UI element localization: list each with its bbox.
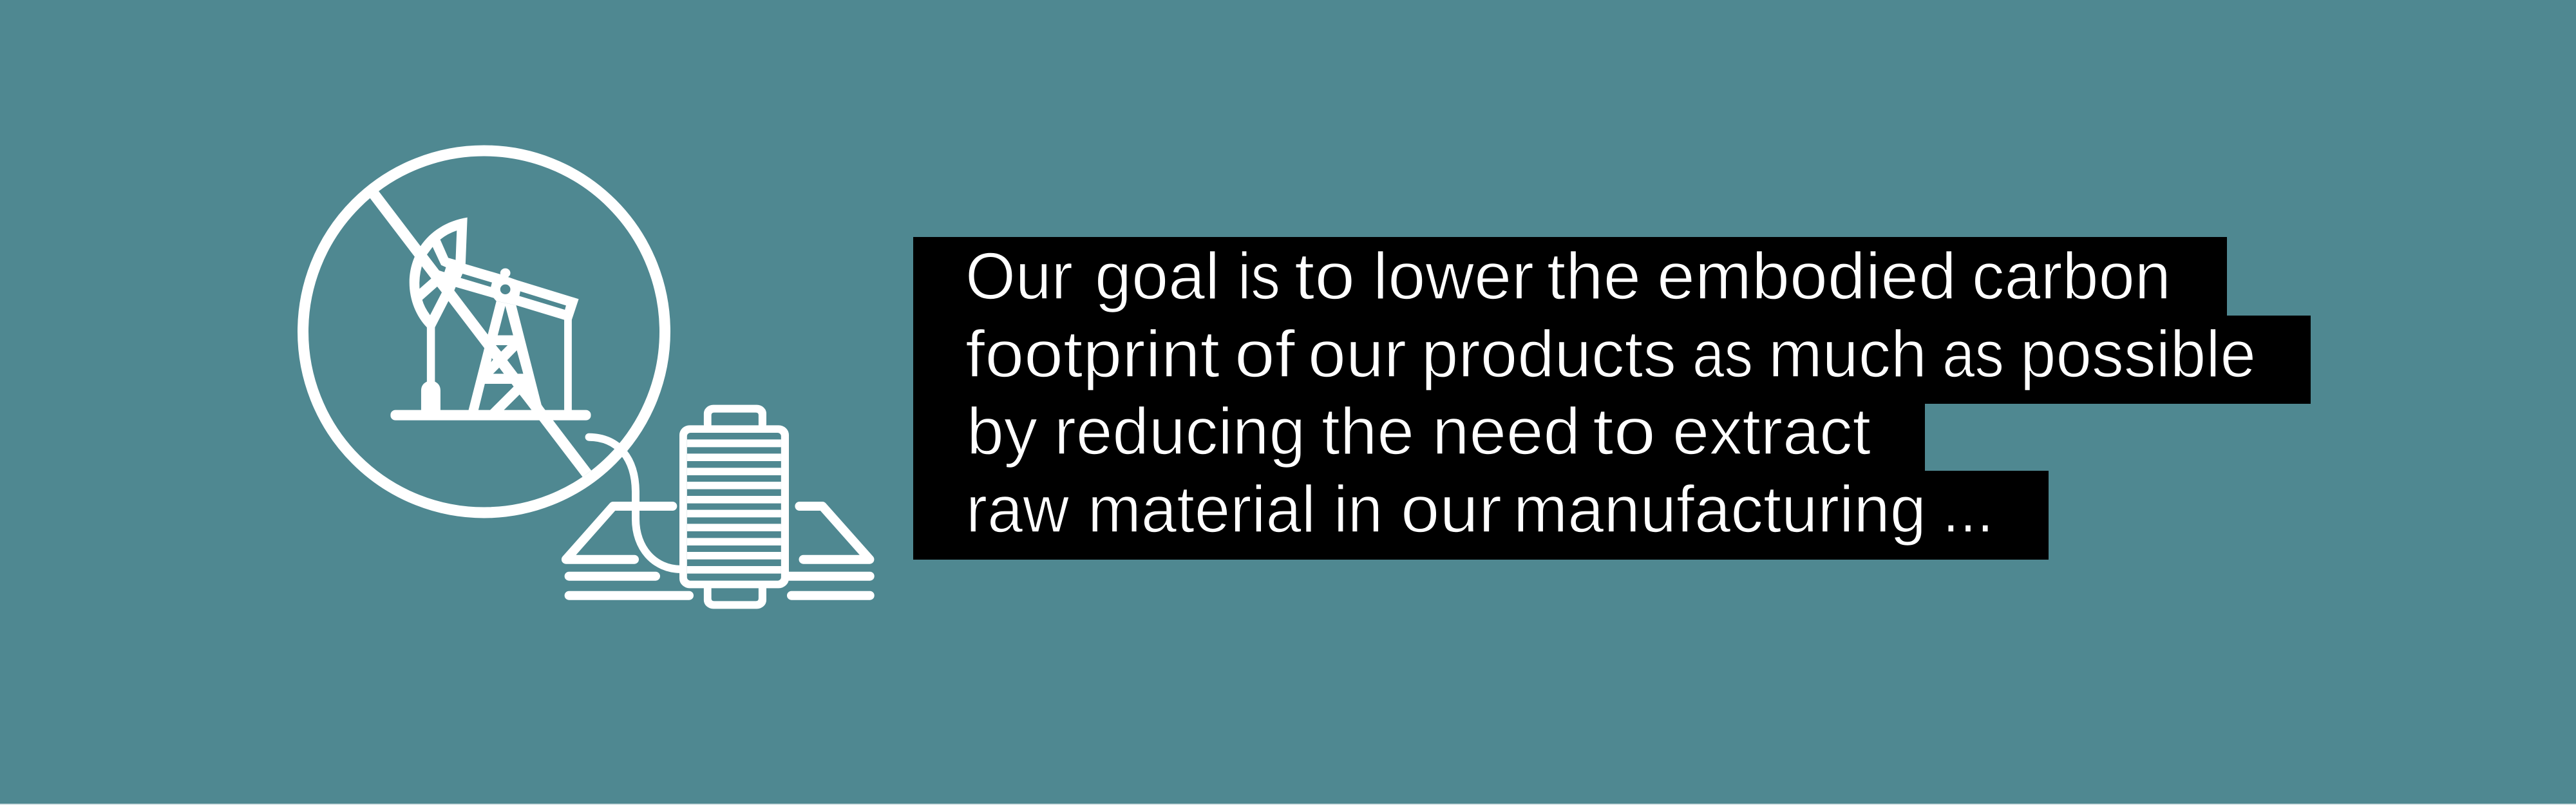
quote line 3: to [1593,394,1656,468]
quote line 2: as [1692,317,1753,391]
oil pump jack [370,191,591,477]
quote line 4: our [1401,472,1502,546]
core [679,425,789,588]
quote line 1: Our [965,239,1073,313]
prohibition circle [303,151,665,513]
quote line 1: lower [1373,239,1534,313]
quote line 3: by [967,394,1037,468]
icon: spool of recycled thread [566,405,870,609]
icon: crossed-out oil pump [303,151,665,513]
spool body [679,405,789,609]
derrick frame [468,301,545,411]
prohibition slash [370,191,591,477]
quote line 4: material [1088,472,1316,546]
walking beam [445,264,579,320]
quote line 4: in [1334,472,1383,546]
horse head [410,218,468,327]
quote line 2: footprint [965,317,1220,391]
quote line 3: extract [1672,394,1871,468]
top cap [704,405,766,433]
quote line 2: our [1308,317,1406,391]
quote line 2: products [1421,317,1676,391]
cloth lines [569,576,870,596]
base bar [390,410,591,421]
quote line 1: is [1238,239,1280,313]
quote line 3: reducing [1054,394,1305,468]
quote line 3: the [1321,394,1414,468]
quote line 3: need [1432,394,1580,468]
thread windings [687,439,781,574]
right cloth [799,506,869,560]
quote line 2: possible [2020,317,2256,391]
pivot [500,269,510,278]
left cloth [566,506,672,560]
quote line 2: much [1768,317,1927,391]
quote line 1: embodied [1657,239,1956,313]
left rod and counterweight [421,327,440,411]
callout: black highlighted text block [913,237,2311,560]
quote line 1: carbon [1972,239,2171,313]
quote line 4: raw [966,472,1070,546]
quote line 4: ... [1942,472,1994,546]
quote line 4: manufacturing [1513,472,1926,546]
thread wire [589,437,681,569]
quote line 1: the [1547,239,1641,313]
bottom cap [704,580,766,609]
quote line 2: of [1235,317,1295,391]
right rod [564,319,572,411]
quote line 1: to [1294,239,1355,313]
black highlight background [913,237,2311,560]
quote line 1: goal [1095,239,1220,313]
quote line 2: as [1942,317,2004,391]
